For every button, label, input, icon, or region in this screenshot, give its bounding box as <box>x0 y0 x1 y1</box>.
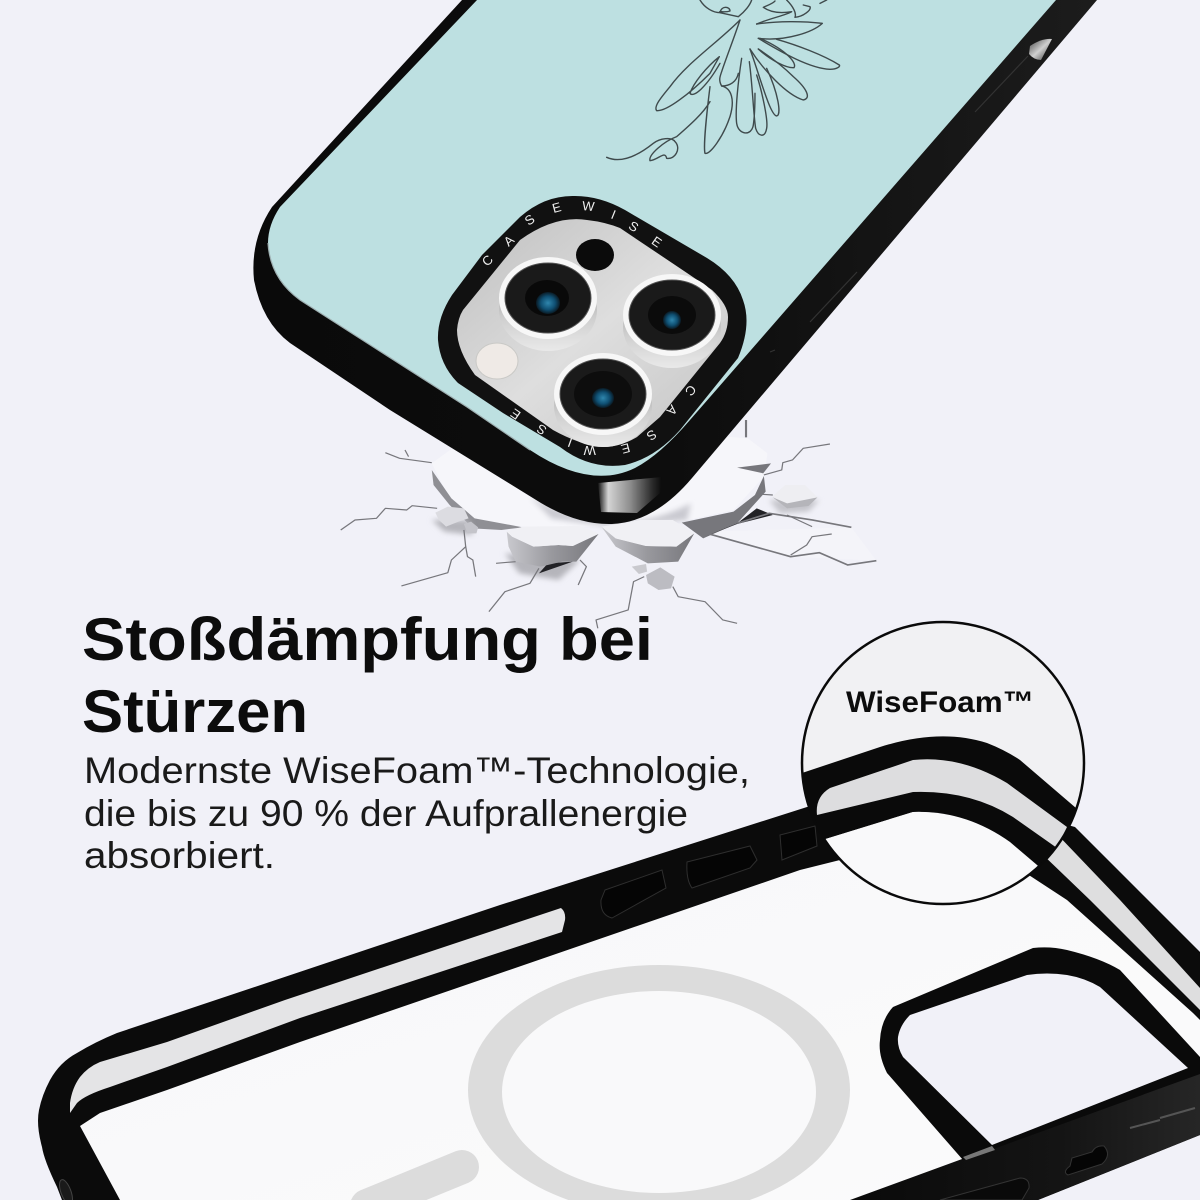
body text: die bis zu 90 % der Aufprallenergie <box>84 793 688 834</box>
side buttons <box>601 826 817 918</box>
right foam strip <box>1040 832 1200 1010</box>
brand text top: CASEWISE <box>479 198 665 269</box>
body text: absorbiert. <box>84 835 275 876</box>
silver side button <box>1029 39 1052 60</box>
magnifier outline <box>802 622 1084 904</box>
body text <box>84 750 750 876</box>
rock left large <box>507 526 599 567</box>
body text: Modernste WiseFoam™-Technologie, <box>84 750 750 791</box>
magsafe orientation pill <box>367 1167 462 1200</box>
microphone hole <box>576 239 614 271</box>
heading: Stürzen <box>82 678 308 745</box>
clear back panel <box>80 830 1200 1200</box>
phone black bumper frame <box>253 0 1097 524</box>
case black frame <box>38 790 1200 1200</box>
left foam strip <box>70 908 565 1113</box>
camera island <box>438 196 747 466</box>
magnifier label: WiseFoam™ <box>846 686 1034 719</box>
illustration: cracked ground impact <box>341 420 876 628</box>
line art figure <box>607 0 840 161</box>
bottom ports <box>57 1108 1195 1200</box>
small rocks <box>435 485 817 590</box>
brand text bottom: CASEWISE <box>507 382 699 458</box>
flash <box>476 343 518 379</box>
camera cutout <box>880 947 1200 1160</box>
camera ring black <box>438 196 747 466</box>
lens bottom <box>554 353 652 447</box>
teal edge highlight <box>268 243 530 450</box>
rock right large <box>601 520 694 563</box>
heading: Stoßdämpfung bei <box>82 606 653 673</box>
magsafe ring <box>468 965 850 1200</box>
teal case back <box>268 0 1056 476</box>
crack lines <box>341 420 876 628</box>
transparent phone case <box>38 790 1200 1200</box>
crack wall facets and shadows <box>432 463 819 580</box>
raised plates around impact <box>432 433 876 561</box>
heading <box>82 606 653 745</box>
lower band shading <box>850 1072 1200 1200</box>
camera plate <box>457 219 728 447</box>
magnified frame <box>804 736 1076 866</box>
magnifier background <box>802 622 1084 904</box>
phone with teal case falling <box>253 0 1097 524</box>
bottom corner highlight <box>598 477 662 513</box>
lens top-left <box>499 257 597 351</box>
side seam lines <box>770 56 1028 352</box>
lens right <box>623 274 721 368</box>
magnifier circle: WiseFoam detail <box>790 622 1090 910</box>
